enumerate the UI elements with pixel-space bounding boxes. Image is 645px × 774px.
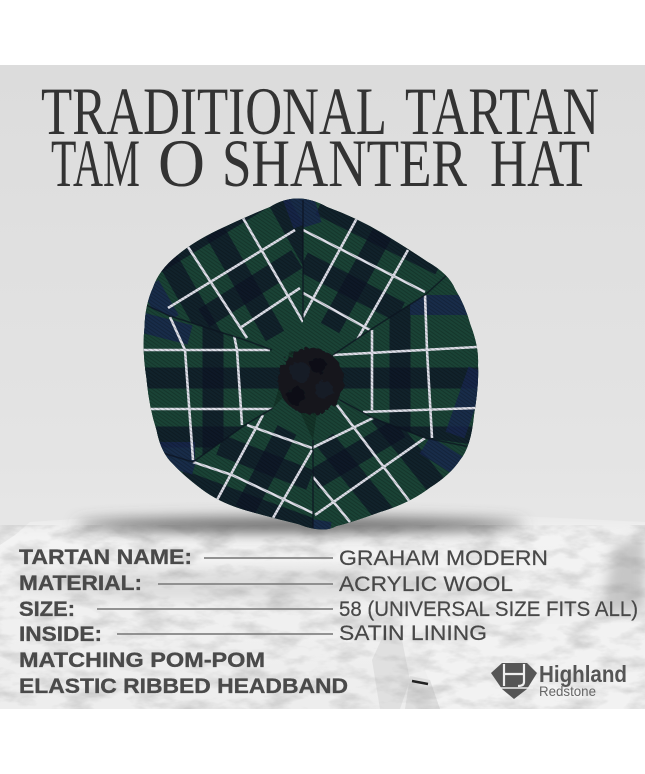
spec row: size: [19, 598, 638, 621]
gore: top right: [303, 198, 448, 355]
logo: Highland Redstone: Highland: [539, 661, 627, 687]
spec row: inside: INSIDE:: [19, 623, 102, 646]
spec row: tartan name: TARTAN NAME:: [19, 546, 192, 569]
tartan hat: [144, 198, 478, 530]
gore: top left: [146, 198, 303, 352]
spec row: tartan name: [19, 546, 548, 570]
gore folds: [146, 200, 470, 530]
logo: Highland Redstone: Redstone: [539, 683, 596, 699]
spec row: material: ACRYLIC WOOL: [339, 573, 513, 596]
spec row: size: SIZE:: [19, 598, 75, 621]
spec row: tartan name: GRAHAM MODERN: [339, 547, 548, 570]
pom-pom: [278, 348, 344, 414]
feature: elastic ribbed headband: ELASTIC RIBBED HEADBAND: [19, 675, 348, 698]
spec row: material: MATERIAL:: [19, 572, 142, 595]
spec row: material: [19, 572, 513, 596]
icon: diamond monogram: [491, 663, 537, 699]
spec row: inside: SATIN LINING: [339, 622, 487, 645]
spec row: inside: [19, 622, 487, 646]
title: O: [158, 125, 205, 201]
gore: right: [333, 278, 478, 444]
feature: matching pom-pom: MATCHING POM-POM: [19, 649, 265, 672]
gore: bottom right: [313, 400, 468, 530]
weave texture: [144, 198, 478, 530]
title: TRADITIONAL: [41, 73, 387, 149]
gore: bottom left: [167, 398, 313, 528]
spec row: size: 58 (UNIVERSAL SIZE FITS ALL): [339, 598, 638, 621]
title: SHANTER: [222, 125, 467, 201]
title: HAT: [490, 125, 590, 201]
title: [41, 73, 599, 201]
stone plinth: [0, 514, 645, 709]
logo: Highland Redstone: [491, 661, 627, 699]
hat shadow: [75, 518, 525, 532]
gore: left: [144, 306, 290, 462]
title: TAM: [51, 125, 140, 201]
